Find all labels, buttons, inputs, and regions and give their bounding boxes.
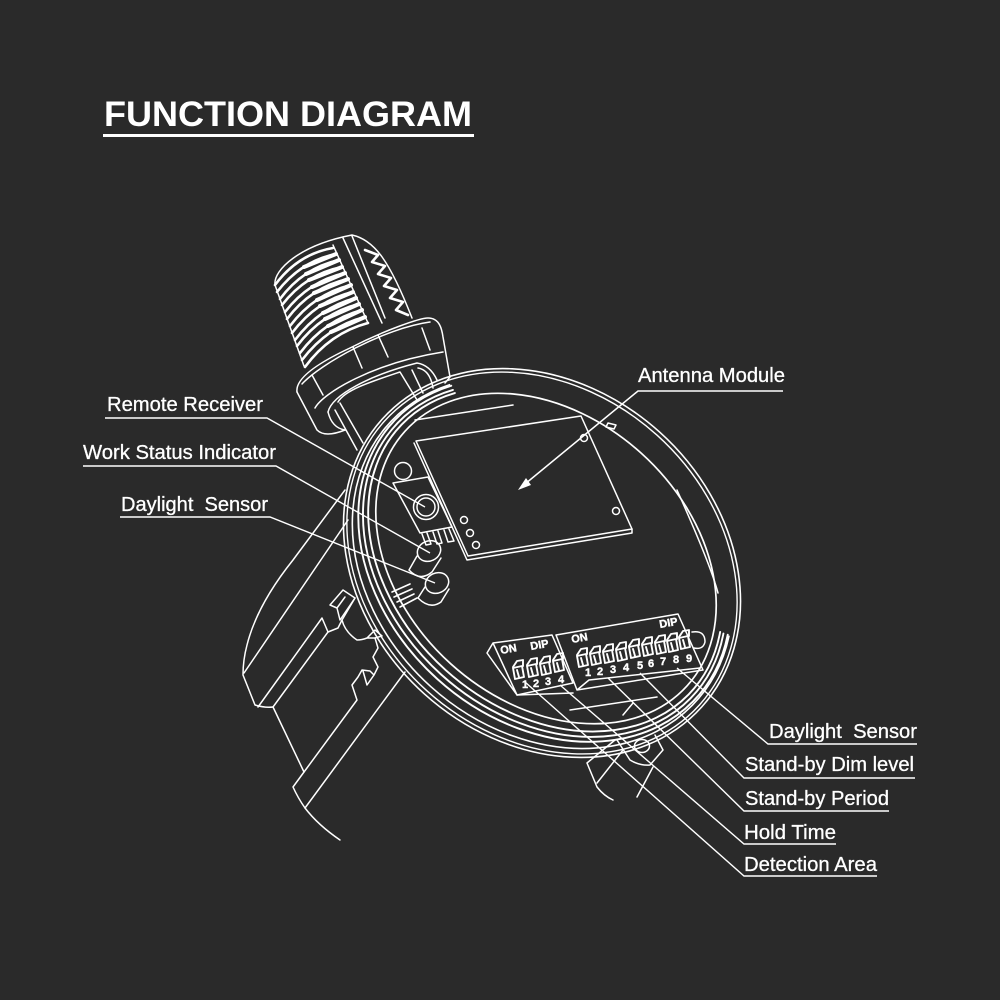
label: Stand-by Dim level: Stand-by Dim level [745,754,914,776]
9-way DIP switch: 2 [597,666,603,678]
label: Remote Receiver: Remote Receiver [107,394,263,416]
9-way DIP switch: 9 [686,653,692,665]
4-way DIP switch: ON [499,642,518,657]
leader: Work Status Indicator [83,466,430,553]
round housing rings [264,288,820,838]
9-way DIP switch: 6 [648,658,654,670]
leader: Stand-by Dim level [640,673,915,778]
rim hatch [392,584,417,607]
9-way DIP switch: 4 [623,662,630,674]
leader: Antenna Module [518,391,783,490]
antenna module board [414,416,632,560]
housing body [243,490,405,840]
leader: Remote Receiver [105,418,425,507]
9-way DIP switch: ON [570,631,589,646]
label: Work Status Indicator: Work Status Indicator [83,442,276,464]
9-way DIP switch: 8 [673,654,679,666]
leader: Stand-by Period [608,678,889,811]
9-way DIP switch: 1 [585,667,591,679]
label: Stand-by Period: Stand-by Period [745,788,889,810]
label: Hold Time: Hold Time [744,822,836,844]
4-way DIP switch: 4 [558,674,565,686]
leader: Daylight Sensor left [120,517,435,583]
4-way DIP switch: DIP [529,638,550,653]
4-way DIP switch: 1 [522,679,528,691]
threaded connector [275,235,412,367]
leader: Daylight Sensor right [677,668,917,744]
4-way DIP switch [487,635,573,695]
daylight sensor [418,569,452,605]
mounting bracket [570,697,663,800]
9-way DIP switch: 3 [610,664,616,676]
hex nut [297,318,450,450]
leader: Hold Time [560,685,836,844]
9-way DIP switch: DIP [658,616,679,631]
9-way DIP switch: 7 [660,656,666,668]
device line drawing [243,235,820,840]
9-way DIP switch [556,614,705,690]
remote receiver [393,462,454,545]
work status indicator [409,537,444,577]
4-way DIP switch: 2 [533,678,539,690]
label: Antenna Module: Antenna Module [638,365,785,387]
inner rim lines [415,405,718,593]
9-way DIP switch: 5 [637,660,643,672]
label: Detection Area: Detection Area [744,854,878,876]
title: FUNCTION DIAGRAM [104,95,472,134]
leader: Detection Area [525,682,877,876]
label: Daylight Sensor left: Daylight Sensor [121,494,268,516]
label: Daylight Sensor right: Daylight Sensor [769,721,917,743]
4-way DIP switch: 3 [545,676,551,688]
